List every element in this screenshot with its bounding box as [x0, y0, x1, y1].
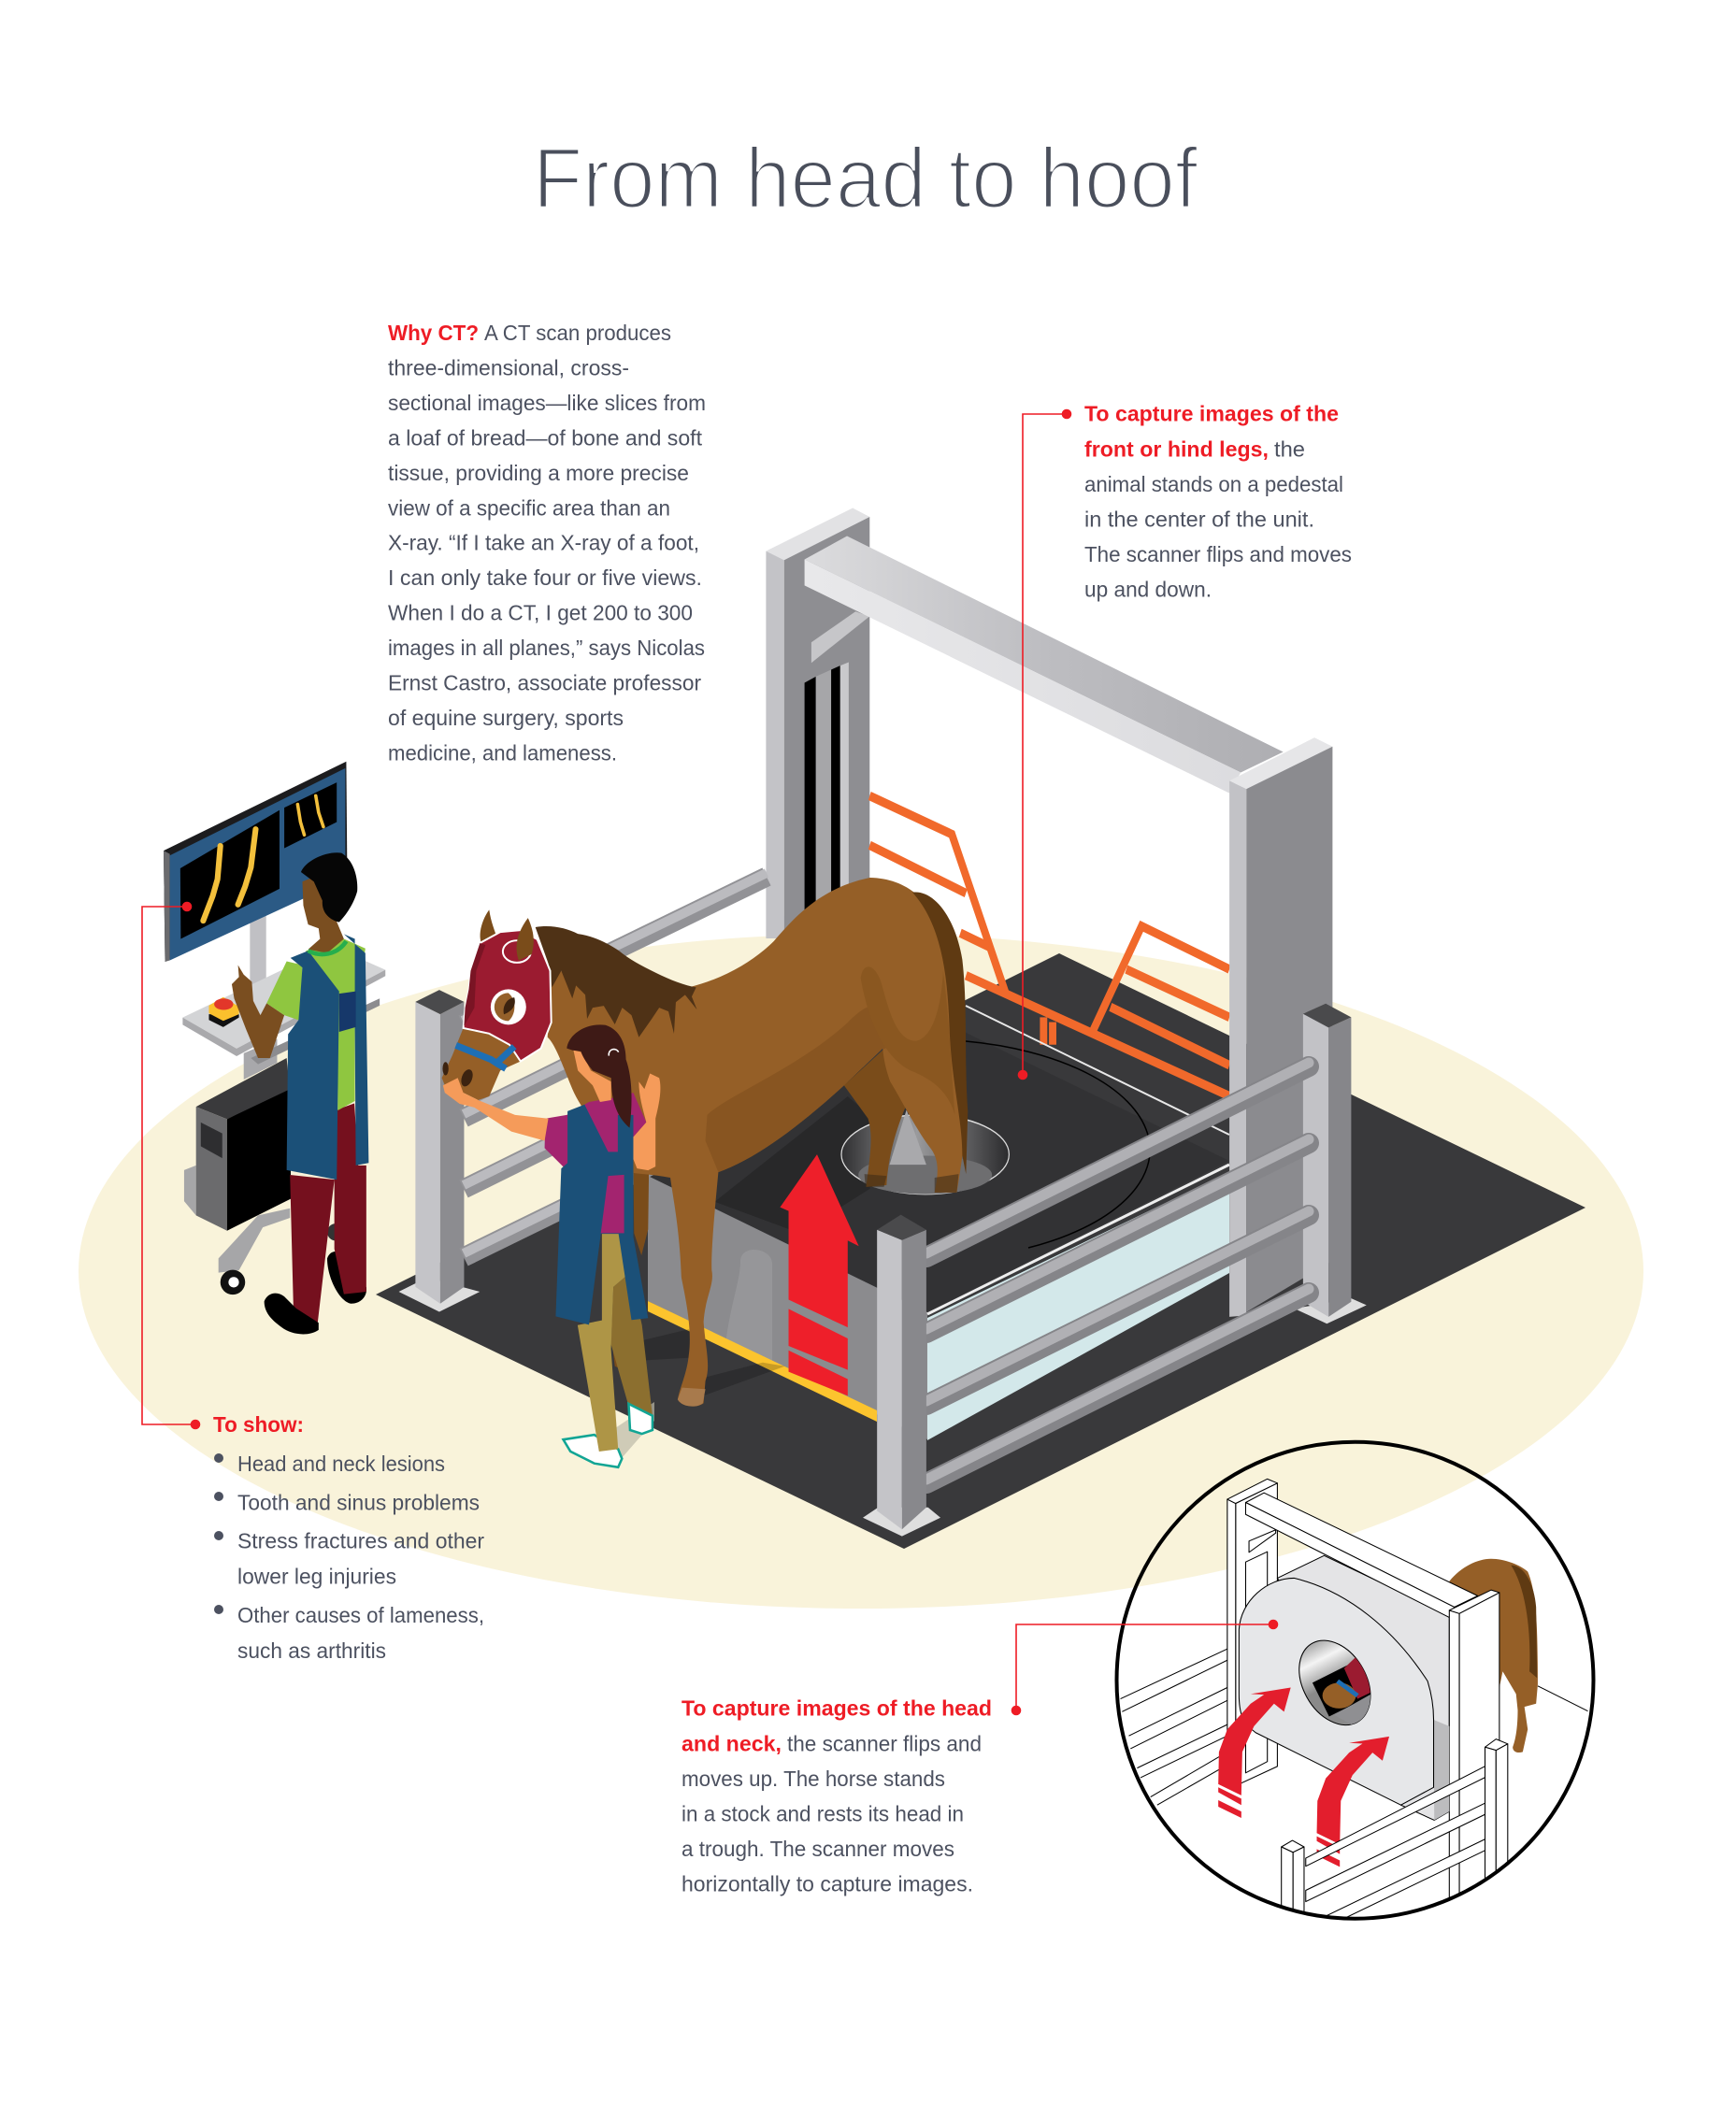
eye [491, 989, 526, 1024]
callout dot legs text [1062, 409, 1071, 419]
item 4: such as arthritis [237, 1638, 386, 1663]
hoof [678, 1388, 706, 1407]
button [214, 998, 233, 1010]
mane [536, 926, 696, 1037]
monitor screen [170, 768, 345, 960]
man trousers [290, 1104, 366, 1323]
computer vent [201, 1123, 222, 1158]
bullet 2 [214, 1492, 223, 1501]
inset head in bore [1313, 1657, 1370, 1724]
text: front or hind legs: front or hind legs, [1084, 436, 1269, 461]
tail [912, 893, 968, 1174]
platform top [648, 1024, 1229, 1312]
lower pole [244, 1039, 277, 1080]
text: Why CT?: sectional images—like slices from [388, 391, 706, 415]
ear left [481, 909, 498, 950]
callout leader: show list [142, 903, 200, 1428]
text: head and neck: To capture images of the head [681, 1696, 992, 1721]
inset floor line [1538, 1686, 1588, 1711]
monitor pole [250, 910, 266, 989]
technician woman [443, 1024, 660, 1467]
bullet 1 [214, 1453, 223, 1463]
desk edge [182, 970, 385, 1056]
x-ray small [284, 782, 337, 849]
ear right [517, 918, 534, 961]
shadows under horse [638, 1096, 873, 1395]
text: Why CT?: I can only take four or five views. [388, 565, 702, 590]
text: Why CT? [388, 321, 706, 765]
woman front leg [578, 1234, 630, 1452]
hood shadow [464, 943, 485, 1026]
background ellipse [79, 934, 1643, 1609]
callout dot scanner [1270, 1621, 1277, 1628]
legs in hole shade [865, 1174, 958, 1193]
bullet 4 [214, 1605, 223, 1614]
callout dot monitor [183, 903, 191, 910]
rear left rails [463, 873, 767, 1257]
man sleeve [266, 961, 302, 1021]
hood [464, 930, 552, 1061]
rear scanner tower [766, 508, 869, 938]
computer side [196, 1107, 227, 1231]
item 4 [237, 1603, 484, 1663]
woman floor shadow [598, 1402, 654, 1458]
inset arrow 2 [1317, 1737, 1389, 1867]
woman vest [555, 1105, 648, 1324]
scanner crossbeam [805, 536, 1284, 794]
inset beam [1245, 1493, 1478, 1620]
pedestal hole [841, 1109, 1009, 1195]
technician man [232, 852, 368, 1334]
caster [221, 1270, 245, 1295]
man rear shoe [327, 1252, 366, 1304]
text: front or hind legs: To capture images of the [1084, 402, 1339, 426]
computer front [227, 1089, 291, 1231]
woman arm left [443, 1078, 549, 1141]
mouth [442, 1062, 449, 1076]
front fence post [863, 1215, 940, 1537]
text: head and neck: moves up. The horse stands [681, 1767, 945, 1791]
woman shirt [545, 1093, 646, 1233]
monitor left edge [164, 851, 170, 962]
inset horse [1449, 1559, 1538, 1752]
text: Why CT?: view of a specific area than an [388, 495, 670, 520]
text: head and neck [681, 1696, 992, 1896]
item 1: Head and neck lesions [237, 1452, 445, 1476]
x-ray large [180, 810, 280, 938]
text: front or hind legs: animal stands on a pedestal [1084, 472, 1343, 496]
item 3: Stress fractures and other [237, 1529, 484, 1553]
man vest strap [339, 992, 356, 1032]
glass side panel [927, 1172, 1229, 1440]
item 3: lower leg injuries [237, 1565, 396, 1589]
woman arm right [633, 1074, 660, 1170]
bones [203, 795, 323, 921]
hair tie [609, 1050, 619, 1056]
text: Why CT?: tissue, providing a more precise [388, 461, 689, 485]
translucent side panel [725, 1250, 772, 1363]
nostril [459, 1067, 475, 1088]
man head [302, 877, 344, 953]
inset right tower [1449, 1590, 1499, 1913]
callout leader: head and neck [1011, 1621, 1277, 1714]
inset left fence lines [1121, 1649, 1227, 1805]
inset front fence [1282, 1739, 1508, 1937]
text: To show list: To show: [213, 1412, 304, 1437]
text: Why CT?: three-dimensional, cross- [388, 355, 629, 379]
monitor frame [164, 762, 347, 962]
woman legs and shoes [564, 1234, 653, 1467]
muzzle [442, 1028, 521, 1100]
text: head and neck: the scanner flips and [787, 1731, 982, 1755]
text: Why CT?: of equine surgery, sports [388, 706, 624, 730]
man shirt [306, 938, 366, 1110]
halter [456, 1045, 514, 1068]
button base [208, 1014, 239, 1027]
inset scanner face [1239, 1578, 1434, 1805]
bullet 3 [214, 1531, 223, 1540]
right fence post [1295, 1004, 1367, 1323]
inset left tower [1227, 1479, 1277, 1786]
text: head and neck: a trough. The scanner moves [681, 1837, 954, 1861]
text: front or hind legs: in the center of the unit. [1084, 507, 1314, 531]
text: head and neck: and neck, [681, 1731, 782, 1755]
item 3 [237, 1529, 484, 1589]
title: From head to hoof [533, 131, 1198, 226]
ear hole [503, 940, 531, 963]
hip fold [861, 966, 954, 1115]
woman front shoe [564, 1435, 622, 1467]
man arm [232, 966, 284, 1058]
caster hub [228, 1277, 239, 1287]
inset circle outline [1116, 1442, 1593, 1919]
horse [442, 878, 968, 1407]
woman back shoe [628, 1404, 653, 1434]
cart base [184, 1166, 290, 1273]
workstation [164, 762, 385, 1295]
man collar [308, 941, 346, 954]
far hind leg [844, 1049, 907, 1187]
inset tail [1511, 1566, 1537, 1678]
man vest [287, 934, 368, 1180]
woman vest shirt gap [601, 1175, 624, 1233]
lower shelf [251, 998, 380, 1065]
text: Why CT?: a loaf of bread—of bone and soft [388, 425, 703, 450]
text: Why CT?: A CT scan produces [484, 321, 671, 345]
pedestal ring outline [966, 1041, 1150, 1248]
eye iris [495, 993, 514, 1021]
inset scanner side lower [1434, 1720, 1449, 1820]
inset arrow 1 [1218, 1688, 1291, 1818]
rear white edge [966, 1006, 1229, 1135]
front rails [926, 1063, 1309, 1483]
far front leg [613, 1166, 649, 1370]
inset scanner side [1277, 1555, 1449, 1820]
woman upper body [443, 1024, 660, 1324]
inset: head and neck configuration [1121, 1479, 1588, 1937]
button box [208, 997, 239, 1021]
left post [399, 990, 480, 1311]
text: front or hind legs: up and down. [1084, 577, 1212, 601]
man front shoe [265, 1294, 319, 1334]
item 4: Other causes of lameness, [237, 1603, 484, 1627]
pupil [504, 997, 515, 1014]
text: Why CT?: When I do a CT, I get 200 to 300 [388, 601, 693, 625]
rear caster [327, 1223, 344, 1240]
woman back leg [611, 1273, 653, 1416]
inset bore [1298, 1639, 1370, 1725]
belly shading [706, 1006, 888, 1172]
text: head and neck: in a stock and rests its head in [681, 1802, 964, 1826]
red up arrow [780, 1154, 859, 1395]
woman hair [567, 1024, 632, 1128]
desk [182, 946, 385, 1049]
text: To show list [213, 1412, 484, 1663]
body [548, 878, 965, 1407]
callout leader: legs [1019, 409, 1071, 1079]
platform [648, 1006, 1229, 1440]
white edge [927, 1165, 1229, 1314]
yellow safety strip [648, 1301, 877, 1422]
right scanner column [1229, 737, 1332, 1317]
text: front or hind legs [1084, 402, 1352, 601]
text: Why CT?: X-ray. “If I take an X-ray of a foot, [388, 531, 699, 555]
dark floor mat [376, 953, 1585, 1549]
text: front or hind legs: The scanner flips and moves [1084, 542, 1352, 566]
callout dot platform [1019, 1071, 1026, 1079]
text: Why CT?: medicine, and lameness. [388, 741, 617, 765]
callout dot head text [1011, 1707, 1021, 1714]
text: Why CT?: Why CT? [388, 321, 479, 345]
item 2: Tooth and sinus problems [237, 1491, 480, 1515]
man hair [301, 852, 357, 923]
text: Why CT?: Ernst Castro, associate professor [388, 671, 701, 695]
callout dot list [191, 1421, 200, 1428]
text: Why CT?: images in all planes,” says Nicolas [388, 636, 705, 660]
text: head and neck: horizontally to capture images. [681, 1871, 973, 1896]
platform side [648, 1176, 927, 1439]
text: front or hind legs: the [1274, 436, 1305, 461]
woman face [573, 1051, 611, 1102]
orange rear railing [869, 795, 1229, 1096]
computer top [196, 1058, 290, 1119]
